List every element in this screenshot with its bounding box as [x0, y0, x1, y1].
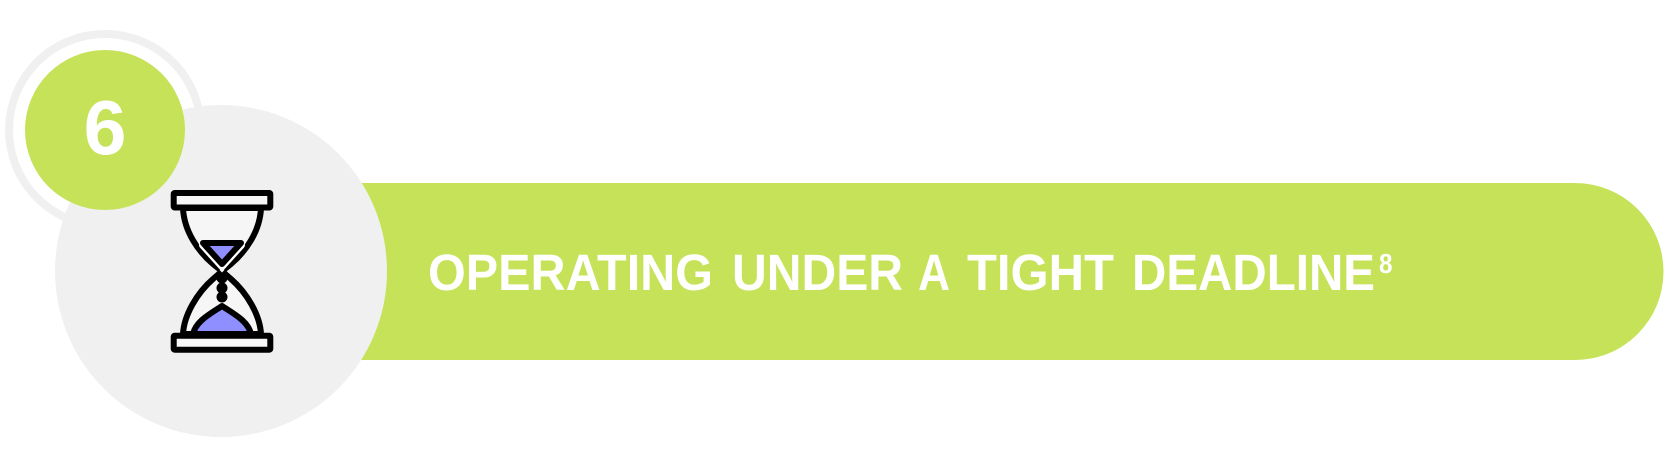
number 6: 6 [84, 86, 126, 172]
title text: OPERATING [428, 244, 713, 301]
title text: A [918, 244, 950, 301]
icon backdrop circle [55, 105, 387, 437]
title text [428, 244, 1375, 301]
footnote marker 8: 8 [1379, 248, 1392, 279]
icon: hourglass [174, 193, 270, 350]
number badge [25, 50, 185, 210]
title text: DEADLINE [1132, 244, 1375, 301]
title banner [300, 183, 1664, 360]
title text: UNDER [732, 244, 903, 301]
title text: TIGHT [967, 244, 1114, 301]
outer ring around number badge [9, 34, 201, 226]
